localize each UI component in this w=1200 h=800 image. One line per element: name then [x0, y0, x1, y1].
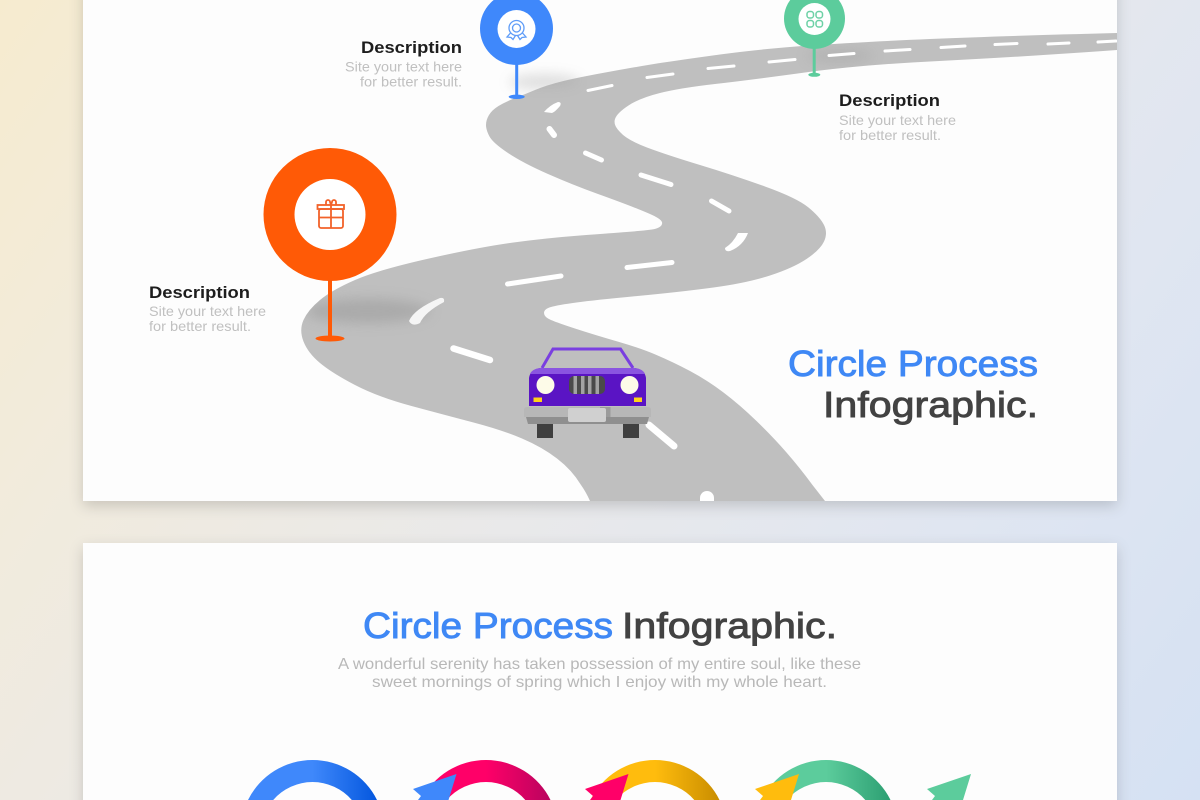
icon: gift [318, 200, 344, 228]
arrow: green [927, 774, 971, 800]
pin shadow on ground [509, 74, 581, 90]
text block: description top: Description [361, 38, 462, 57]
panel: circle process [83, 543, 1117, 800]
arrow: yellow [755, 774, 799, 800]
heading: road title: Circle Process [788, 343, 1038, 384]
text block: description left [149, 283, 266, 334]
subtitle text: A wonderful serenity has taken possession of my entire soul, like these [338, 656, 861, 673]
heading: circle process title: Circle Process [363, 605, 613, 646]
icon: award [507, 20, 526, 40]
circle step 1: blue [248, 760, 377, 800]
circle step 4: green [762, 760, 890, 800]
pin: green apps [784, 0, 845, 77]
circle step 3: yellow [590, 760, 720, 800]
text block: description left: Description [149, 283, 250, 302]
text block: description right [839, 91, 956, 143]
icon: apps grid [807, 12, 822, 27]
arrow: blue [413, 774, 456, 800]
panel: road roadmap [83, 0, 1117, 510]
road [301, 33, 1117, 510]
arrow: pink [585, 774, 628, 800]
road shadows [306, 49, 874, 323]
text block: description right: Description [839, 91, 940, 110]
text block: description top [345, 38, 462, 90]
heading: circle process title: Infographic. [622, 605, 837, 646]
circle step 2: pink [422, 760, 550, 800]
text block: description left: Site your text here [149, 303, 266, 319]
heading: road title [788, 343, 1038, 425]
pin: orange gift [264, 148, 396, 342]
text block: description top: Site your text here [345, 58, 462, 74]
subtitle text [338, 656, 861, 691]
heading: road title: Infographic. [823, 384, 1038, 425]
text block: description right: for better result. [839, 127, 941, 143]
lane dashes [454, 41, 1116, 510]
pin: blue award [480, 0, 553, 99]
text block: description top: for better result. [360, 74, 462, 90]
subtitle text: sweet mornings of spring which I enjoy with my whole heart. [372, 674, 827, 691]
text block: description left: for better result. [149, 318, 251, 334]
icon: purple car [524, 349, 651, 438]
text block: description right: Site your text here [839, 112, 956, 128]
